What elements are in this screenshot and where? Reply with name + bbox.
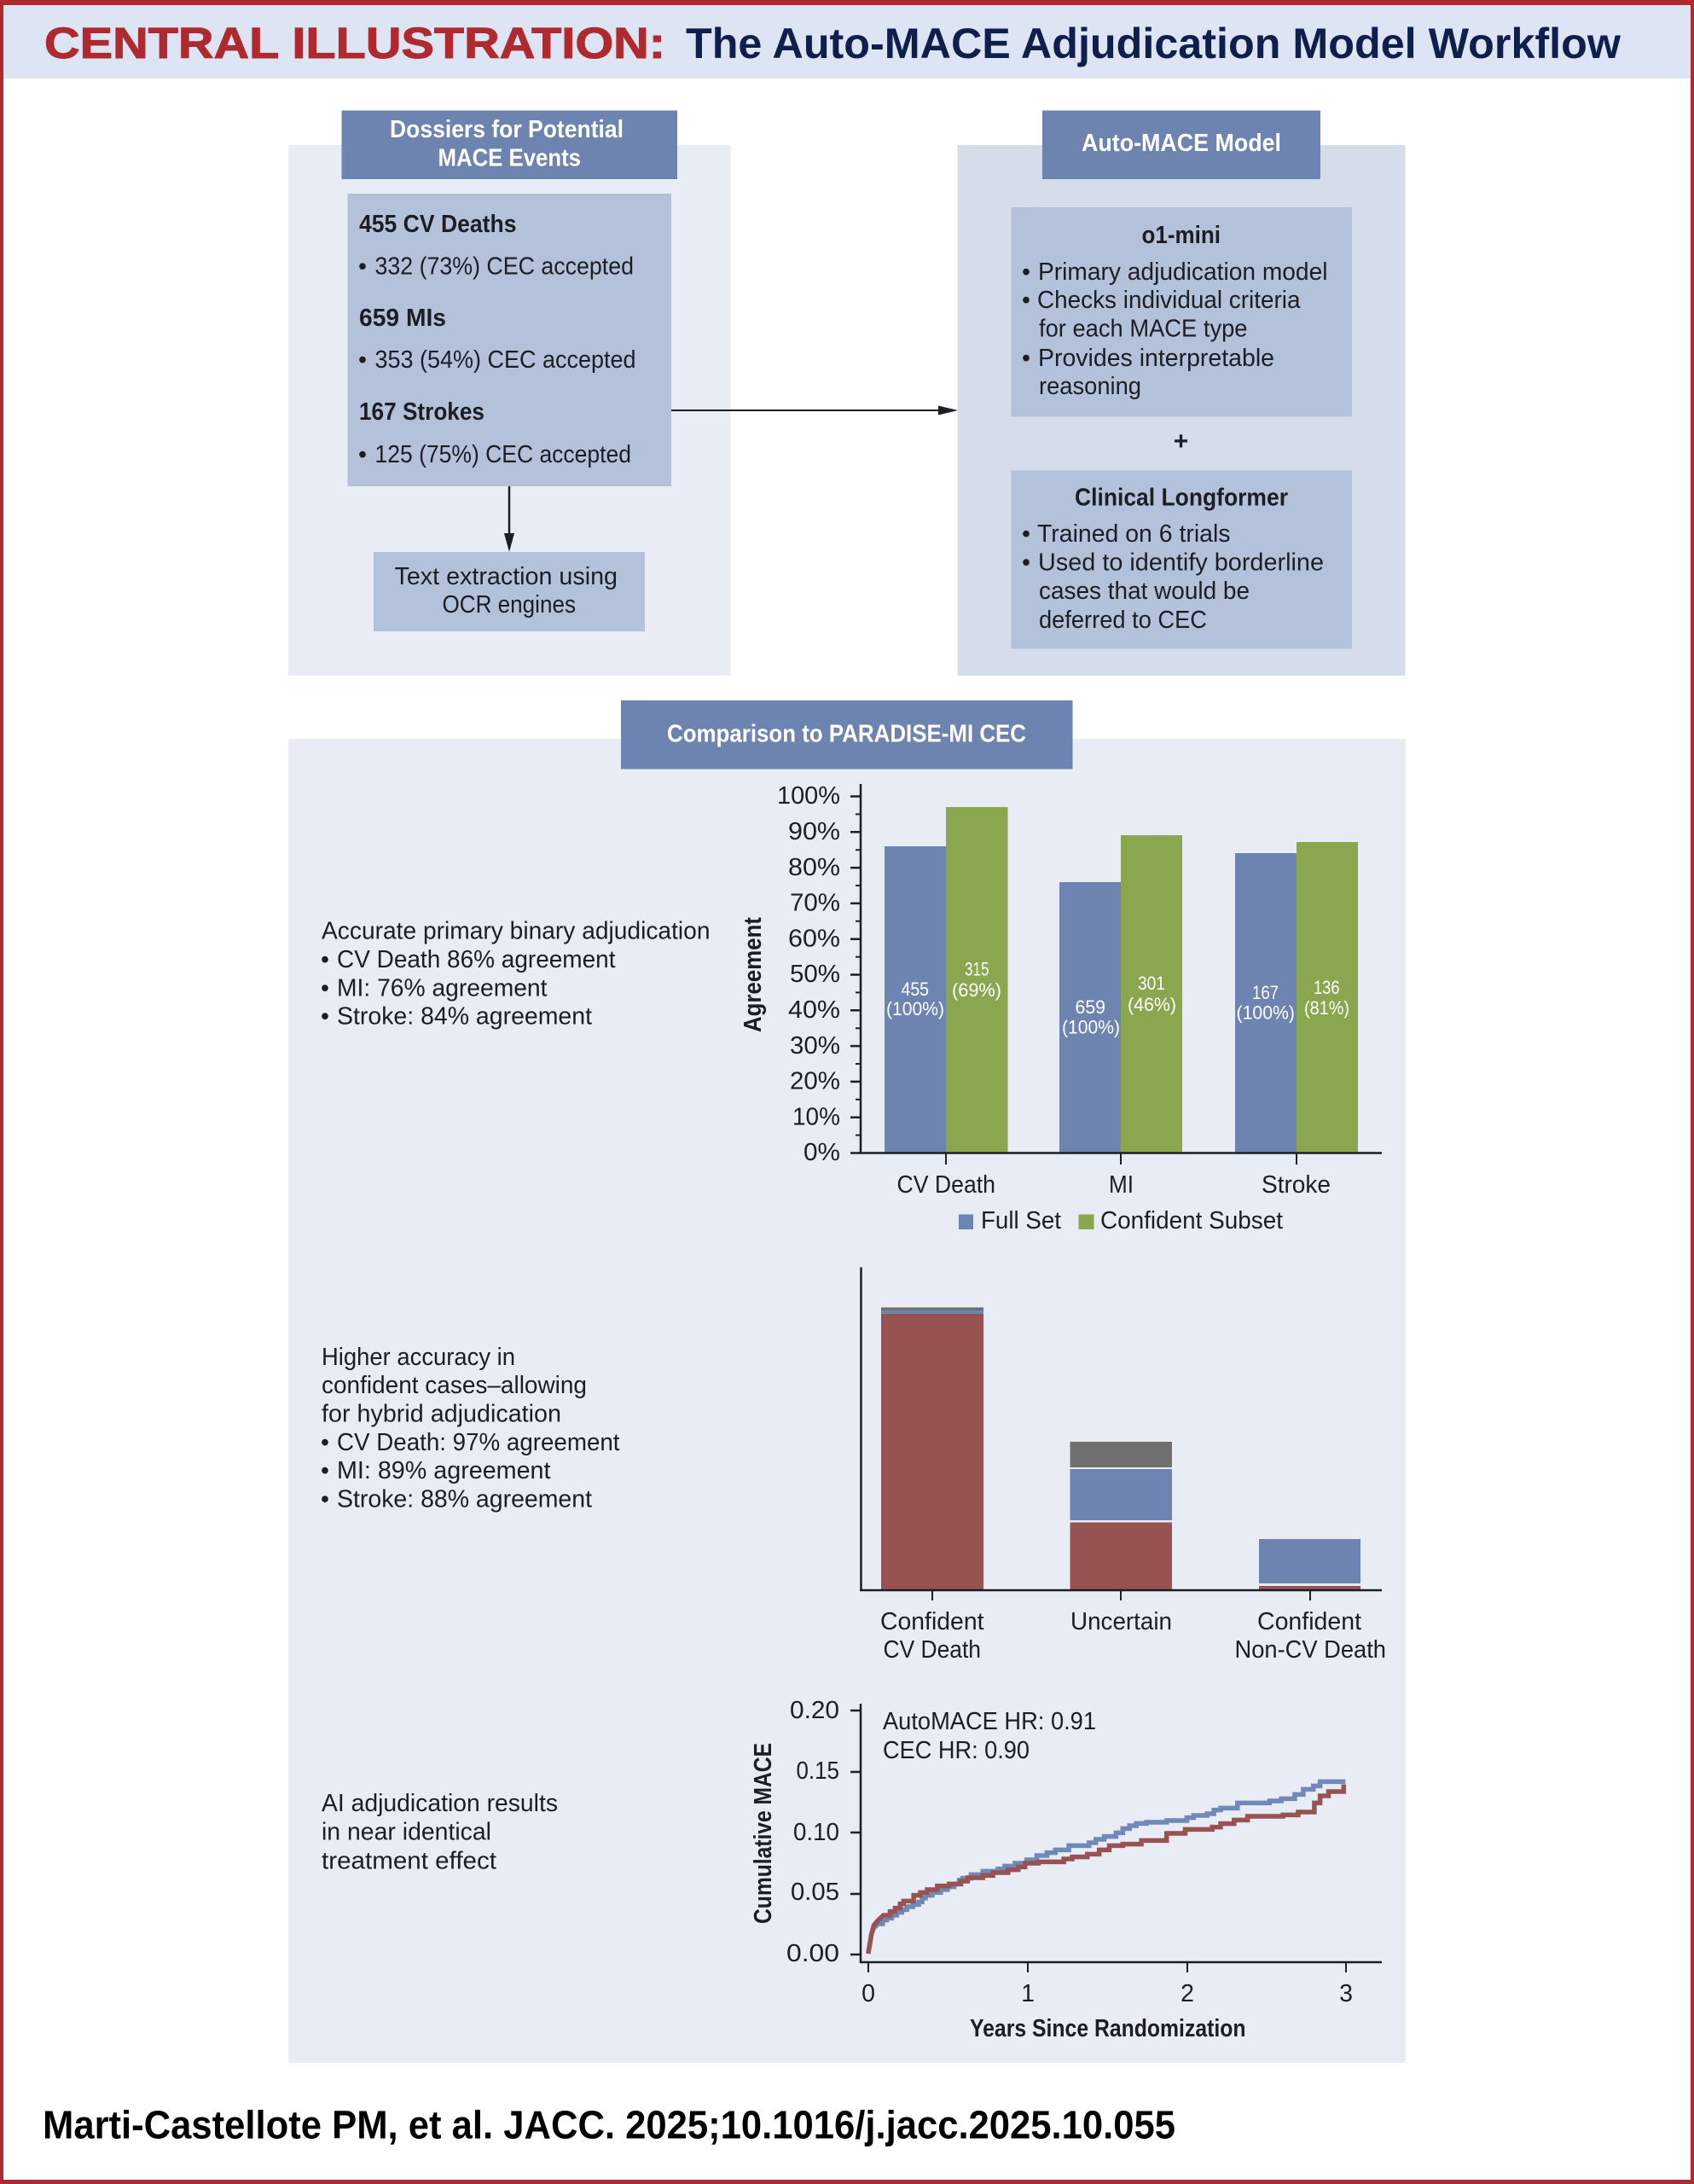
Clinical Longformer box: • (1022, 549, 1030, 577)
x labels (897, 1171, 1331, 1199)
x labels: Non-CV Death (1235, 1636, 1386, 1664)
y tick labels: 0.00 (786, 1940, 839, 1967)
text: higher accuracy in confident cases: Stroke: 88% agreement (337, 1486, 592, 1513)
y tick labels: 0.20 (790, 1697, 839, 1724)
heading: comparison: Comparison to PARADISE-MI CEC (667, 720, 1026, 747)
Clinical Longformer box: Trained on 6 trials (1037, 520, 1230, 548)
hazard ratio annotation: CEC HR: 0.90 (883, 1737, 1030, 1764)
text: accurate primary binary adjudication: • (321, 1003, 329, 1031)
heading: Auto-MACE model (1042, 111, 1320, 179)
Clinical Longformer box: deferred to CEC (1039, 607, 1207, 634)
o1-mini box: Checks individual criteria (1037, 287, 1301, 314)
stacked bar chart: confidence groups (860, 1268, 1386, 1664)
text: higher accuracy in confident cases: • (321, 1486, 329, 1513)
x labels: MI (1109, 1171, 1134, 1199)
event counts box: 659 MIs (359, 305, 446, 332)
x tick labels: 1 (1021, 1980, 1035, 2007)
heading: dossiers: Dossiers for Potential (390, 116, 624, 143)
bars (885, 807, 1358, 1153)
x labels: Uncertain (1070, 1608, 1172, 1635)
text: AI adjudication treatment effect: treatment effect (322, 1848, 496, 1875)
o1-mini box: Primary adjudication model (1038, 258, 1327, 286)
event counts box: 353 (54%) CEC accepted (375, 346, 636, 374)
x labels: Stroke (1262, 1171, 1331, 1199)
text: accurate primary binary adjudication: • (321, 946, 329, 973)
y tick labels: 50% (790, 961, 840, 988)
o1-mini box: • (1022, 287, 1030, 314)
y tick labels: 30% (790, 1032, 840, 1060)
text: accurate primary binary adjudication: MI: 76% agreement (337, 974, 548, 1002)
bar value labels (886, 959, 1349, 1037)
text: accurate primary binary adjudication: Accurate primary binary adjudication (322, 918, 710, 945)
event counts box (348, 194, 671, 486)
bar value labels: 301 (1138, 973, 1165, 994)
Clinical Longformer box (1012, 471, 1352, 648)
text: AI adjudication treatment effect: in near identical (322, 1819, 491, 1846)
text: accurate primary binary adjudication: Stroke: 84% agreement (337, 1003, 592, 1031)
bar value labels: (100%) (1062, 1017, 1120, 1037)
y tick labels: 0% (803, 1139, 840, 1166)
x labels: Confident (880, 1608, 984, 1635)
curve: CEC (868, 1785, 1343, 1954)
axes (860, 1268, 1382, 1600)
arrow: down to text extraction (504, 486, 514, 552)
bar value labels: (100%) (1237, 1002, 1295, 1024)
hazard ratio annotation: AutoMACE HR: 0.91 (883, 1708, 1096, 1735)
legend: Confident Subset (1100, 1207, 1283, 1234)
text: higher accuracy in confident cases: • (321, 1457, 329, 1484)
y tick labels: 20% (790, 1068, 840, 1095)
y tick labels: 10% (792, 1104, 840, 1131)
axes and ticks (850, 1704, 1382, 1972)
y tick labels: 60% (788, 925, 840, 952)
o1-mini box (1012, 207, 1352, 416)
bar value labels: (69%) (952, 979, 1001, 1001)
bar value labels: 167 (1252, 982, 1279, 1003)
arrow: dossiers to model (671, 406, 958, 415)
event counts box: • (358, 253, 367, 280)
y tick labels: 0.05 (791, 1879, 839, 1906)
bar value labels: 136 (1314, 977, 1339, 998)
o1-mini box: Provides interpretable (1038, 345, 1274, 372)
y tick labels (777, 782, 840, 1166)
y tick labels: 40% (788, 996, 840, 1024)
o1-mini box: o1-mini (1141, 222, 1221, 249)
text extraction box: OCR engines (442, 591, 576, 619)
event counts box: 125 (75%) CEC accepted (375, 441, 631, 468)
y tick labels: 100% (777, 782, 840, 810)
text extraction box (374, 552, 645, 631)
line chart: cumulative MACE (750, 1697, 1382, 2042)
text: higher accuracy in confident cases: MI: 89% agreement (337, 1457, 551, 1484)
title banner: The Auto-MACE Adjudication Model Workflow (686, 20, 1621, 67)
hazard ratio annotation (883, 1708, 1096, 1764)
x tick labels: 0 (862, 1980, 875, 2007)
x axis title: Years Since Randomization (970, 2015, 1245, 2042)
heading: comparison (621, 700, 1073, 770)
text: AI adjudication treatment effect (322, 1790, 558, 1875)
heading: dossiers (341, 111, 677, 179)
x tick labels: 3 (1339, 1980, 1353, 2007)
y axis title: Cumulative MACE (750, 1743, 777, 1924)
event counts box: • (358, 346, 367, 374)
text: higher accuracy in confident cases: Higher accuracy in (322, 1344, 515, 1371)
text: higher accuracy in confident cases: for hybrid adjudication (322, 1401, 561, 1428)
o1-mini box: • (1022, 258, 1030, 286)
panel: Auto-MACE model (957, 111, 1406, 676)
title banner (3, 5, 1691, 78)
heading: Auto-MACE model: Auto-MACE Model (1082, 130, 1281, 157)
panel: comparison to PARADISE-MI CEC (288, 700, 1406, 2063)
y tick labels: 70% (790, 889, 840, 916)
legend (959, 1207, 1283, 1234)
x tick labels (862, 1980, 1353, 2007)
o1-mini box: for each MACE type (1039, 316, 1247, 343)
Clinical Longformer box: • (1022, 520, 1030, 548)
bar value labels: 659 (1075, 996, 1105, 1018)
text: accurate primary binary adjudication: CV Death 86% agreement (337, 946, 616, 973)
event counts box: 455 CV Deaths (359, 211, 517, 238)
y tick labels: 80% (788, 854, 840, 881)
y axis title: Agreement (740, 917, 767, 1032)
y tick labels: 0.10 (793, 1819, 839, 1846)
y tick labels: 0.15 (797, 1757, 839, 1785)
title banner: CENTRAL ILLUSTRATION: (44, 19, 665, 67)
plus sign: + (1174, 427, 1188, 456)
x labels: CV Death (897, 1171, 995, 1199)
bar value labels: 315 (965, 959, 989, 979)
citation: Marti-Castellote PM, et al. JACC. 2025;10.1016/j.jacc.2025.10.055 (43, 2102, 1175, 2146)
event counts box: 332 (73%) CEC accepted (375, 253, 634, 280)
bar value labels: (46%) (1128, 994, 1176, 1015)
text: higher accuracy in confident cases: • (321, 1429, 329, 1456)
panel: dossiers for potential MACE events (288, 111, 730, 676)
stacked bars (881, 1307, 1360, 1590)
bar value labels: (100%) (886, 998, 944, 1019)
Clinical Longformer box: Clinical Longformer (1075, 485, 1288, 512)
curve: AutoMACE (868, 1781, 1345, 1954)
heading: dossiers: MACE Events (438, 145, 581, 172)
y axis and ticks (850, 784, 1382, 1165)
event counts box: • (358, 441, 367, 468)
y tick labels: 90% (788, 818, 840, 845)
x labels: Confident (1257, 1608, 1361, 1635)
y tick labels (786, 1697, 839, 1967)
bar value labels: 455 (901, 979, 929, 1000)
text: accurate primary binary adjudication (321, 918, 710, 1031)
x tick labels: 2 (1181, 1980, 1194, 2007)
text: accurate primary binary adjudication: • (321, 974, 329, 1002)
x labels (880, 1608, 1386, 1664)
bar value labels: (81%) (1304, 997, 1349, 1019)
o1-mini box: reasoning (1039, 373, 1141, 400)
legend: Full Set (981, 1207, 1061, 1234)
text: higher accuracy in confident cases: CV Death: 97% agreement (337, 1429, 620, 1456)
text extraction box: Text extraction using (394, 563, 618, 590)
text: AI adjudication treatment effect: AI adjudication results (322, 1790, 558, 1817)
o1-mini box: • (1022, 345, 1030, 372)
text: higher accuracy in confident cases (321, 1344, 620, 1513)
text: higher accuracy in confident cases: confident cases–allowing (322, 1372, 587, 1399)
event counts box: 167 Strokes (359, 398, 484, 426)
x labels: CV Death (884, 1636, 981, 1664)
Clinical Longformer box: Used to identify borderline (1038, 549, 1324, 577)
bar chart: agreement by event type (740, 782, 1382, 1234)
Clinical Longformer box: cases that would be (1039, 578, 1250, 605)
